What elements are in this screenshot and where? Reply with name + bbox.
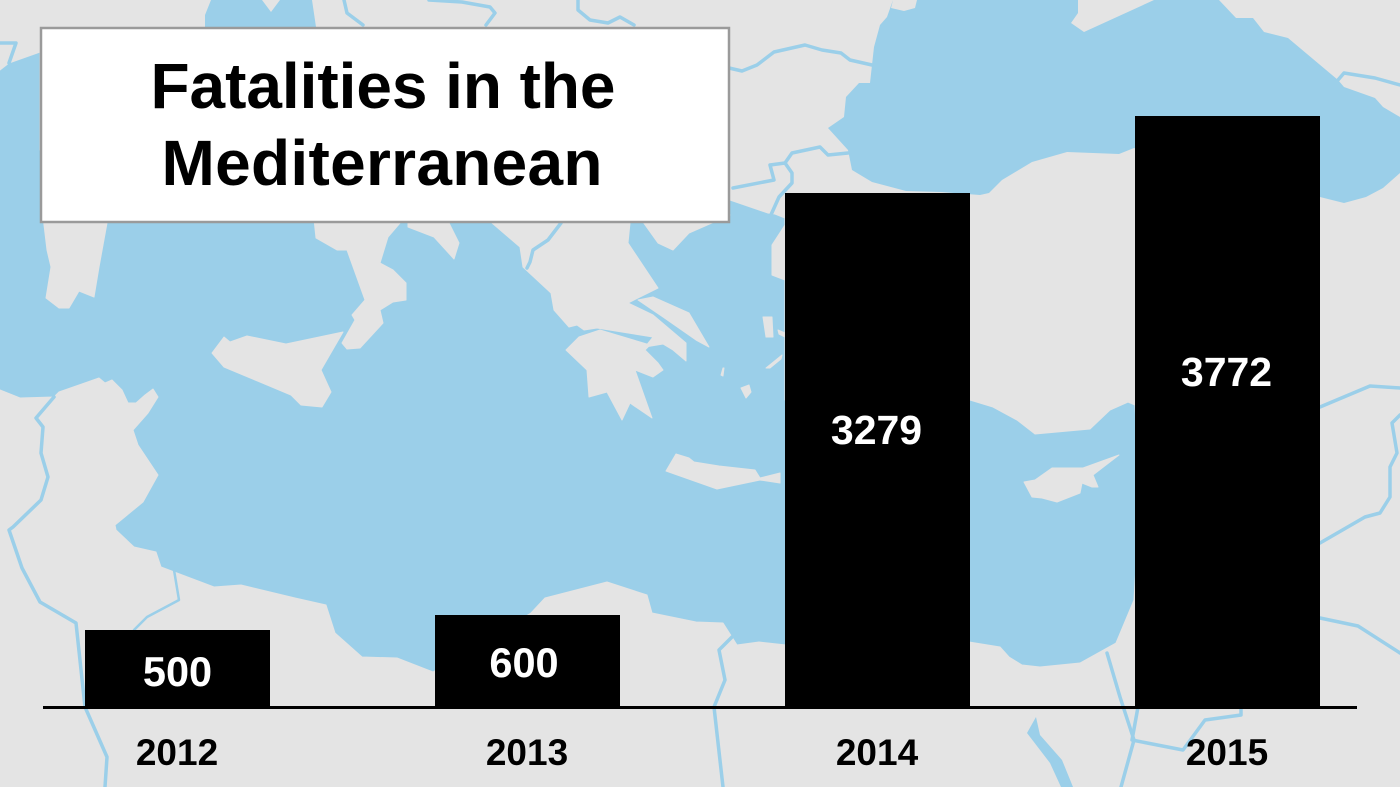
- land: Greek mainland: [492, 200, 686, 361]
- title: [41, 28, 729, 222]
- land: north Africa and Levant: [0, 378, 1400, 787]
- land: Chalkidiki: [638, 215, 730, 250]
- land: Adriatic peninsula: [408, 200, 459, 259]
- bar: 2015: 3772: [1181, 349, 1272, 395]
- year labels: 2012: [136, 732, 218, 773]
- Dead Sea and Jordan: [1027, 717, 1073, 787]
- bar: 2013: 600: [489, 639, 559, 686]
- land: Italy: [312, 200, 406, 349]
- bar chart: [43, 116, 1357, 773]
- land: Euboea: [638, 297, 709, 347]
- title: Fatalities in the: [150, 50, 616, 122]
- land: northern shores and Turkey: [0, 0, 1400, 500]
- axis line: [43, 706, 1357, 709]
- year labels: 2013: [486, 732, 568, 773]
- year labels: 2015: [1186, 732, 1268, 773]
- land: Sardinia: [41, 200, 107, 308]
- Black Sea: [828, 0, 1400, 203]
- title: Mediterranean: [162, 127, 602, 199]
- land: Crete: [666, 454, 780, 489]
- bar: 2014: 3279: [831, 407, 922, 453]
- land: Aegean islands: [721, 317, 785, 398]
- bar: 2015: [1135, 116, 1320, 707]
- land: Cyprus: [1024, 455, 1119, 502]
- year labels: 2014: [836, 732, 919, 773]
- year labels: [136, 732, 1268, 773]
- northern sea inlet: [205, 0, 316, 27]
- land: Peloponnese: [566, 330, 663, 420]
- bar: 2013: [435, 615, 620, 707]
- bar: 2012: [85, 630, 270, 707]
- bar: 2014: [785, 193, 970, 707]
- land: Sicily: [212, 332, 343, 407]
- bar: 2012: 500: [143, 648, 212, 695]
